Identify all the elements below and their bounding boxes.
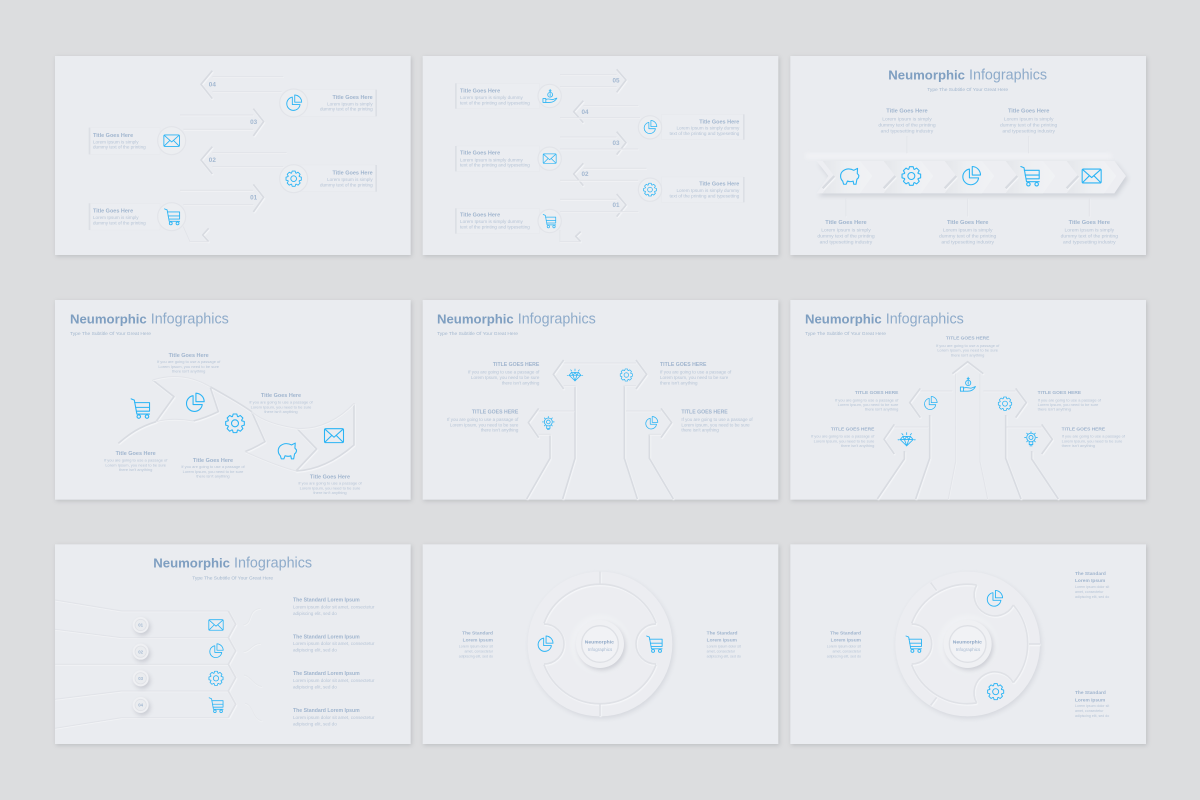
text box: hand row: Title Goes Here bbox=[460, 88, 500, 94]
step numbers: 02 bbox=[581, 171, 589, 178]
text: item 2: Lorem ipsum dolor sit amet, consectetur bbox=[293, 641, 375, 646]
text: pie: there isn't anything bbox=[172, 369, 205, 374]
panel: three-item radial bbox=[790, 544, 1146, 744]
squiggle connectors bbox=[243, 608, 262, 721]
text: upper left: TITLE GOES HERE bbox=[493, 362, 540, 368]
step numbers: 04 bbox=[209, 82, 216, 89]
subtitle: Type The Subtitle Of Your Great Here bbox=[927, 87, 1008, 93]
text: upper right: If you are going to use a passage of bbox=[1038, 397, 1102, 402]
connector chevron arrows bbox=[574, 69, 626, 242]
step numbers bbox=[581, 77, 620, 209]
icon: gear bbox=[620, 369, 632, 381]
text: top right: Lorem ipsum dolor sit bbox=[1075, 585, 1109, 589]
text box: hand row: Lorem Ipsum is simply dummy bbox=[460, 95, 524, 100]
text: item 2 bbox=[293, 634, 375, 653]
icon: pie chart bbox=[924, 397, 937, 410]
icon: gear bbox=[226, 414, 244, 433]
panel: five branching paths bbox=[790, 300, 1146, 500]
text: cart: Title Goes Here bbox=[116, 451, 156, 457]
text: upper right bbox=[1038, 390, 1102, 412]
faint rails and central shaft bbox=[894, 374, 1042, 499]
text: lower left: If you are going to use a passage of bbox=[811, 434, 875, 439]
text box: mail row: Title Goes Here bbox=[460, 151, 500, 157]
text: mail: Title Goes Here bbox=[310, 474, 350, 480]
text: pie: If you are going to use a passage of bbox=[157, 359, 221, 364]
text box: lower right bbox=[297, 165, 377, 192]
text: pie bbox=[157, 353, 221, 374]
connector rails bbox=[180, 77, 287, 242]
text: lower left: there isn't anything bbox=[841, 443, 874, 448]
text: piggy bbox=[249, 393, 314, 414]
panel: numbered list arrows bbox=[55, 544, 411, 744]
text: top right: adipiscing elit, sed do bbox=[1075, 595, 1109, 599]
text: mail: If you are going to use a passage of bbox=[298, 481, 363, 486]
text: centre: there isn't anything bbox=[951, 352, 984, 357]
text: upper left bbox=[468, 362, 540, 385]
text: gear: there isn't anything bbox=[196, 474, 230, 479]
text: cart: there isn't anything bbox=[119, 467, 152, 472]
icon: light bulb bbox=[542, 417, 554, 430]
centre glow bbox=[936, 612, 999, 676]
text box: pie row bbox=[662, 114, 745, 140]
text: gear: Title Goes Here bbox=[193, 458, 233, 464]
text: item 4: The Standard Lorem Ipsum bbox=[293, 708, 360, 714]
text: top right: Title Goes Here bbox=[1008, 109, 1049, 115]
text box: top right: Lorem Ipsum is simply bbox=[327, 101, 373, 106]
text: top right: amet, consectetur bbox=[1075, 590, 1104, 594]
text: bottom centre: Title Goes Here bbox=[947, 220, 988, 226]
panel: two-item radial bbox=[423, 544, 778, 744]
icon: pie chart bbox=[987, 590, 1003, 606]
text: left: Lorem ipsum dolor sit bbox=[459, 644, 493, 648]
panel: zigzag four steps bbox=[55, 56, 411, 255]
text: upper left: there isn't anything bbox=[502, 380, 540, 385]
number badge 01: 01 bbox=[138, 623, 144, 628]
text: left: adipiscing elit, sed do bbox=[459, 654, 493, 658]
icon: pie chart bbox=[280, 89, 308, 117]
text: top left: and typesetting industry bbox=[881, 128, 934, 134]
text: item 3: adipiscing elit, sed do bbox=[293, 685, 337, 690]
icon: mail bbox=[158, 127, 186, 155]
text: item 1: The Standard Lorem Ipsum bbox=[293, 598, 360, 604]
text: right: adipiscing elit, sed do bbox=[707, 654, 741, 658]
text: item 3 bbox=[293, 671, 375, 690]
icon: pie chart bbox=[538, 636, 553, 651]
outer ring bbox=[528, 572, 672, 716]
text: upper right: Lorem Ipsum, you need to be sure bbox=[660, 375, 729, 380]
stems bbox=[846, 136, 1089, 217]
text box: lower right: Title Goes Here bbox=[333, 170, 373, 176]
text: item 1: Lorem ipsum dolor sit amet, consectetur bbox=[293, 604, 375, 609]
panel: winding arrows bbox=[55, 300, 411, 500]
text: centre bbox=[936, 336, 1000, 357]
text box: pie row: Lorem Ipsum is simply dummy bbox=[676, 126, 740, 131]
text: bottom right: Lorem ipsum dolor sit bbox=[1075, 704, 1109, 708]
text: piggy: If you are going to use a passage of bbox=[249, 399, 314, 404]
icon: cart bbox=[647, 636, 662, 652]
faint grooves bbox=[153, 377, 354, 471]
step numbers: 02 bbox=[209, 157, 216, 164]
text: upper right: Lorem Ipsum, you need to be sure bbox=[1038, 402, 1099, 407]
icon: gear bbox=[638, 178, 662, 201]
text: bottom right: amet, consectetur bbox=[1075, 709, 1104, 713]
icon: piggy bank bbox=[278, 443, 296, 459]
text: left: The Standard bbox=[830, 630, 861, 636]
text: upper right: there isn't anything bbox=[660, 380, 698, 385]
text: gear: Lorem Ipsum, you need to be sure bbox=[183, 469, 244, 474]
panel: four branching paths bbox=[423, 300, 778, 500]
text: right bbox=[707, 630, 741, 658]
text: upper left: TITLE GOES HERE bbox=[855, 390, 899, 396]
text box: bottom left: dummy text of the printing bbox=[93, 220, 146, 225]
fanned arrow grooves bbox=[55, 600, 228, 728]
winding grooves bbox=[118, 380, 354, 471]
text box: mail row bbox=[455, 146, 539, 171]
connector chevron arrows bbox=[201, 71, 264, 242]
text: centre: If you are going to use a passage of bbox=[936, 343, 1000, 348]
text: lower left: there isn't anything bbox=[481, 428, 519, 433]
text: left bbox=[459, 630, 494, 658]
text box: middle left bbox=[89, 128, 160, 154]
text: lower right: there isn't anything bbox=[681, 428, 719, 433]
text: right: Lorem Ipsum bbox=[707, 638, 737, 644]
text: lower right: there isn't anything bbox=[1062, 443, 1095, 448]
icon: pie chart bbox=[638, 116, 662, 139]
text box: pie row: Title Goes Here bbox=[699, 119, 739, 125]
text: cart bbox=[104, 451, 168, 472]
text: pie: Title Goes Here bbox=[169, 353, 209, 359]
number badge 04: 04 bbox=[138, 703, 144, 708]
step numbers: 03 bbox=[612, 140, 620, 147]
text: bottom right: Title Goes Here bbox=[1069, 220, 1110, 226]
centre button bbox=[944, 620, 992, 668]
panel: horizontal chevron process bbox=[790, 56, 1146, 255]
text box: gear row: Lorem Ipsum is simply dummy bbox=[676, 188, 740, 193]
icon: cart bbox=[131, 399, 150, 418]
chevron arrow base bbox=[817, 161, 1126, 193]
text: lower right: Lorem Ipsum, you need to be sure bbox=[681, 422, 750, 427]
heading: Neumorphic Infographics bbox=[70, 311, 229, 327]
text: upper left: Lorem Ipsum, you need to be sure bbox=[838, 402, 899, 407]
text: item 1 bbox=[293, 598, 375, 616]
text: lower right: If you are going to use a passage of bbox=[681, 417, 753, 422]
text box: gear row: Title Goes Here bbox=[699, 181, 739, 187]
icon: gear bbox=[998, 397, 1012, 410]
icon: gear bbox=[209, 671, 223, 685]
text: bottom right: and typesetting industry bbox=[1063, 240, 1116, 246]
text: item 2: adipiscing elit, sed do bbox=[293, 648, 337, 653]
text: top left: Lorem Ipsum is simply bbox=[882, 116, 932, 122]
text: lower left bbox=[811, 426, 875, 448]
top light band bbox=[805, 153, 1112, 159]
text box: middle left: Lorem Ipsum is simply bbox=[93, 139, 139, 144]
icon: light bulb bbox=[1025, 432, 1037, 446]
text: lower left: If you are going to use a passage of bbox=[447, 417, 519, 422]
text box: hand row bbox=[455, 83, 539, 109]
text: gear: If you are going to use a passage of bbox=[181, 464, 246, 469]
text: piggy: Lorem Ipsum, you need to be sure bbox=[251, 404, 312, 409]
text box: cart row bbox=[455, 208, 539, 234]
icon: gear bbox=[988, 684, 1004, 700]
text: top left bbox=[878, 109, 936, 134]
text box: pie row: text of the printing and typesetting bbox=[669, 131, 740, 136]
icon: pie chart bbox=[963, 166, 980, 185]
centre button: Infographics bbox=[588, 647, 613, 652]
panel: zigzag five steps bbox=[423, 56, 778, 255]
heading: Neumorphic Infographics bbox=[805, 311, 964, 327]
text: lower right bbox=[681, 409, 753, 433]
text box: gear row bbox=[662, 177, 745, 202]
step numbers: 01 bbox=[612, 202, 620, 209]
text: upper left: If you are going to use a passage of bbox=[468, 370, 540, 375]
inner disc grooves bbox=[912, 583, 1040, 705]
step numbers bbox=[209, 82, 258, 202]
text: lower right bbox=[1062, 426, 1126, 448]
text: left: The Standard bbox=[462, 630, 493, 636]
heading: Neumorphic Infographics bbox=[888, 67, 1047, 83]
text: lower left: TITLE GOES HERE bbox=[472, 409, 519, 415]
text: top right: Lorem Ipsum bbox=[1075, 578, 1105, 584]
text: lower right: TITLE GOES HERE bbox=[1062, 426, 1106, 432]
text: item 4 bbox=[293, 708, 375, 727]
text box: top right bbox=[297, 90, 377, 116]
text: bottom right: adipiscing elit, sed do bbox=[1075, 714, 1109, 718]
text: piggy: Title Goes Here bbox=[261, 393, 301, 399]
text box: middle left: Title Goes Here bbox=[93, 133, 133, 139]
centre button: Infographics bbox=[956, 647, 981, 652]
text: bottom right: dummy text of the printing bbox=[1061, 234, 1118, 240]
branch grooves bbox=[877, 362, 1058, 499]
text: item 3: Lorem ipsum dolor sit amet, consectetur bbox=[293, 678, 375, 683]
icon: hand with coin bbox=[960, 377, 975, 391]
text box: bottom left: Lorem Ipsum is simply bbox=[93, 215, 139, 220]
inner disc grooves bbox=[544, 572, 656, 716]
text: upper right: TITLE GOES HERE bbox=[660, 362, 707, 368]
icon: piggy bank bbox=[841, 168, 859, 184]
number badge 03: 03 bbox=[138, 676, 144, 681]
icon: mail bbox=[324, 429, 343, 443]
icon: cart bbox=[538, 209, 561, 233]
text box: lower right: Lorem Ipsum is simply bbox=[327, 177, 373, 182]
text: top right: The Standard bbox=[1075, 571, 1106, 577]
text: upper right: there isn't anything bbox=[1038, 407, 1071, 412]
icon: cart bbox=[209, 698, 223, 713]
number badge 02 bbox=[133, 644, 149, 660]
icon: pie chart bbox=[210, 644, 223, 658]
text: piggy: there isn't anything bbox=[264, 409, 298, 414]
text: gear bbox=[181, 458, 246, 479]
text: bottom left: Lorem Ipsum is simply bbox=[821, 228, 871, 234]
text box: cart row: Title Goes Here bbox=[460, 213, 500, 219]
arrow tips bbox=[228, 611, 236, 718]
text box: top right: Title Goes Here bbox=[333, 95, 373, 101]
text: upper left bbox=[835, 390, 899, 412]
text: upper right: If you are going to use a passage of bbox=[660, 370, 732, 375]
icon: cart bbox=[1021, 166, 1039, 186]
text: item 4: Lorem ipsum dolor sit amet, consectetur bbox=[293, 715, 375, 720]
text: bottom right bbox=[1075, 690, 1109, 718]
text: item 3: The Standard Lorem Ipsum bbox=[293, 671, 360, 677]
icon: cart bbox=[906, 636, 921, 652]
outer ring bbox=[895, 572, 1040, 716]
text box: bottom left bbox=[89, 203, 160, 230]
text: left bbox=[827, 630, 862, 658]
step numbers: 03 bbox=[250, 119, 258, 126]
text: upper left: Lorem Ipsum, you need to be sure bbox=[471, 375, 540, 380]
step numbers: 04 bbox=[581, 109, 589, 116]
text: bottom centre: and typesetting industry bbox=[941, 240, 994, 246]
text: centre: Lorem Ipsum, you need to be sure bbox=[937, 348, 999, 353]
step numbers: 01 bbox=[250, 195, 258, 202]
text: lower right: If you are going to use a passage of bbox=[1062, 434, 1126, 439]
chevron segments bbox=[823, 161, 1116, 193]
text: bottom left: and typesetting industry bbox=[820, 240, 873, 246]
text box: bottom left: Title Goes Here bbox=[93, 209, 133, 215]
heading: Neumorphic Infographics bbox=[153, 555, 312, 571]
text: pie: Lorem Ipsum, you need to be sure bbox=[158, 364, 220, 369]
text box: top right: dummy text of the printing bbox=[320, 107, 373, 112]
text: item 2: The Standard Lorem Ipsum bbox=[293, 634, 360, 640]
subtitle: Type The Subtitle Of Your Great Here bbox=[192, 575, 273, 581]
text: lower right: Lorem Ipsum, you need to be sure bbox=[1062, 438, 1123, 443]
icon: pie chart bbox=[646, 416, 658, 429]
number badge 04 bbox=[133, 697, 149, 713]
centre button bbox=[576, 620, 624, 668]
icon: gear bbox=[902, 167, 921, 185]
text: right: amet, consectetur bbox=[707, 649, 736, 653]
text box: cart row: Lorem Ipsum is simply dummy bbox=[460, 219, 524, 224]
step numbers: 05 bbox=[612, 77, 620, 84]
subtitle: Type The Subtitle Of Your Great Here bbox=[70, 331, 151, 337]
text: top right: Lorem Ipsum is simply bbox=[1004, 116, 1054, 122]
icon: pie chart bbox=[187, 393, 204, 411]
connector rails bbox=[560, 75, 647, 242]
centre button: Neumorphic bbox=[585, 639, 614, 645]
text: upper right bbox=[660, 362, 732, 385]
text: upper left: there isn't anything bbox=[865, 407, 898, 412]
text: upper right: TITLE GOES HERE bbox=[1038, 390, 1082, 396]
text: mail bbox=[298, 474, 363, 495]
text: mail: Lorem Ipsum, you need to be sure bbox=[300, 486, 361, 491]
text: upper left: If you are going to use a passage of bbox=[835, 397, 899, 402]
text: bottom right: Lorem Ipsum is simply bbox=[1065, 228, 1115, 234]
icon: mail bbox=[1082, 169, 1101, 183]
faint rails bbox=[539, 363, 661, 434]
icon: diamond bbox=[567, 369, 583, 381]
text: bottom right: The Standard bbox=[1075, 690, 1106, 696]
text: right: The Standard bbox=[707, 630, 738, 636]
text: bottom left: dummy text of the printing bbox=[817, 234, 875, 240]
text box: gear row: text of the printing and typesetting bbox=[669, 193, 740, 198]
text: bottom centre bbox=[939, 220, 997, 246]
icon: hand with coin bbox=[538, 84, 561, 108]
text: left: amet, consectetur bbox=[833, 649, 862, 653]
text: bottom right: Lorem Ipsum bbox=[1075, 697, 1105, 703]
text: top right bbox=[1075, 571, 1109, 599]
text: left: Lorem Ipsum bbox=[831, 638, 861, 644]
text: lower left: Lorem Ipsum, you need to be sure bbox=[814, 438, 875, 443]
text: bottom centre: Lorem Ipsum is simply bbox=[943, 228, 993, 234]
text: top right: and typesetting industry bbox=[1002, 128, 1055, 134]
text: right: Lorem ipsum dolor sit bbox=[707, 644, 741, 648]
text: bottom left bbox=[817, 220, 875, 246]
text: bottom centre: dummy text of the printing bbox=[939, 234, 997, 240]
subtitle: Type The Subtitle Of Your Great Here bbox=[805, 331, 886, 337]
text: top right bbox=[1000, 109, 1058, 134]
text box: middle left: dummy text of the printing bbox=[93, 145, 146, 150]
text: top left: Title Goes Here bbox=[886, 109, 928, 115]
text: item 1: adipiscing elit, sed do bbox=[293, 611, 337, 616]
centre glow bbox=[568, 612, 632, 676]
icon: cart bbox=[158, 203, 186, 231]
text: lower left bbox=[447, 409, 519, 433]
text: item 4: adipiscing elit, sed do bbox=[293, 722, 337, 727]
text: cart: If you are going to use a passage of bbox=[104, 457, 168, 462]
heading: Neumorphic Infographics bbox=[437, 311, 596, 327]
text: lower right: TITLE GOES HERE bbox=[681, 409, 728, 415]
text: top left: dummy text of the printing bbox=[878, 122, 936, 128]
text box: cart row: text of the printing and typesetting bbox=[460, 224, 530, 229]
subtitle: Type The Subtitle Of Your Great Here bbox=[437, 331, 518, 337]
text box: mail row: Lorem Ipsum is simply dummy bbox=[460, 157, 524, 162]
text box: hand row: text of the printing and typesetting bbox=[460, 100, 530, 105]
icon: diamond bbox=[898, 433, 915, 446]
text: bottom right bbox=[1061, 220, 1118, 246]
number badge 02: 02 bbox=[138, 649, 144, 654]
text: cart: Lorem Ipsum, you need to be sure bbox=[105, 462, 167, 467]
text: mail: there isn't anything bbox=[313, 490, 347, 495]
text: top right: dummy text of the printing bbox=[1000, 122, 1058, 128]
text: left: Lorem ipsum dolor sit bbox=[827, 644, 861, 648]
icon: mail bbox=[538, 147, 561, 170]
text: left: Lorem Ipsum bbox=[463, 638, 493, 644]
text: lower left: Lorem Ipsum, you need to be sure bbox=[450, 422, 519, 427]
text: bottom left: Title Goes Here bbox=[825, 220, 867, 226]
text box: mail row: text of the printing and typesetting bbox=[460, 163, 530, 168]
number badge 01 bbox=[133, 617, 149, 633]
text box: lower right: dummy text of the printing bbox=[320, 182, 373, 187]
text: left: amet, consectetur bbox=[465, 649, 494, 653]
text: centre: TITLE GOES HERE bbox=[946, 336, 990, 342]
text: left: adipiscing elit, sed do bbox=[827, 654, 861, 658]
branch grooves bbox=[527, 360, 673, 499]
number badge 03 bbox=[133, 670, 149, 686]
text: lower left: TITLE GOES HERE bbox=[831, 426, 875, 432]
icon: mail bbox=[209, 620, 223, 630]
centre button: Neumorphic bbox=[953, 639, 982, 645]
icon: gear bbox=[280, 165, 308, 193]
